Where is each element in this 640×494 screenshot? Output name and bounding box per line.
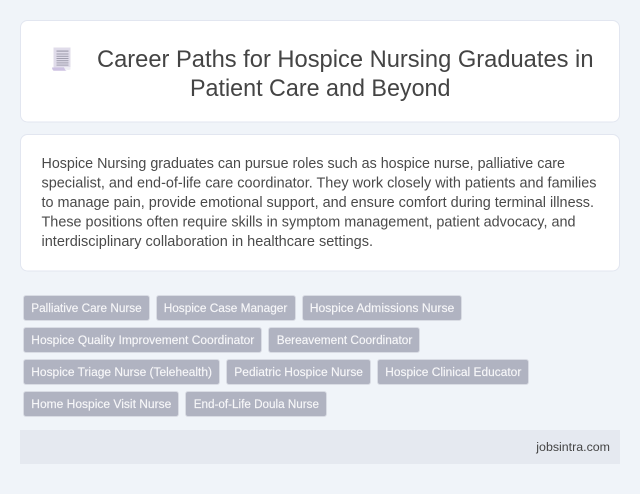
title: Patient Care and Beyond — [190, 75, 450, 102]
tag: Hospice Case Manager — [156, 296, 296, 320]
tag: Hospice Quality Improvement Coordinator — [24, 328, 262, 352]
tag: Hospice Admissions Nurse: Hospice Admissions Nurse — [310, 301, 454, 315]
tag: Hospice Quality Improvement Coordinator: Hospice Quality Improvement Coordinator — [31, 333, 254, 347]
tag: Bereavement Coordinator — [268, 328, 420, 352]
tag: Palliative Care Nurse: Palliative Care Nurse — [31, 301, 142, 315]
footer bar — [20, 430, 620, 464]
tag: Hospice Triage Nurse (Telehealth) — [24, 360, 220, 384]
tag: Hospice Admissions Nurse — [302, 296, 462, 320]
tag: Hospice Clinical Educator — [378, 360, 528, 384]
tag: End-of-Life Doula Nurse — [186, 392, 326, 416]
text block: description: specialist, and end-of-life care coordinator. They work closely with patients and families — [42, 176, 596, 192]
text block: description: to manage pain, provide emotional support, and ensure comfort during terminal illness. — [42, 195, 594, 211]
text block: description: interdisciplinary collaboration in healthcare settings. — [42, 234, 373, 250]
tag: Pediatric Hospice Nurse — [226, 360, 370, 384]
text block: description: These positions often require skills in symptom management, patient advocacy, and — [42, 214, 576, 230]
text block: description — [42, 156, 596, 250]
tag: Hospice Case Manager: Hospice Case Manager — [164, 301, 287, 315]
tag: Home Hospice Visit Nurse: Home Hospice Visit Nurse — [31, 397, 171, 411]
tag: Hospice Clinical Educator: Hospice Clinical Educator — [385, 365, 521, 379]
tag: Hospice Triage Nurse (Telehealth): Hospice Triage Nurse (Telehealth) — [31, 365, 212, 379]
footer source text: jobsintra.com — [535, 440, 610, 454]
text block: description: Hospice Nursing graduates can pursue roles such as hospice nurse, palliative care — [42, 156, 565, 172]
icon: document scroll — [52, 48, 70, 71]
tag: Palliative Care Nurse — [24, 296, 150, 320]
tag: Bereavement Coordinator: Bereavement Coordinator — [277, 333, 412, 347]
panel: header card — [20, 20, 620, 122]
title — [97, 46, 594, 102]
tag list: career roles — [24, 296, 528, 416]
title: Career Paths for Hospice Nursing Graduates in — [97, 46, 594, 73]
panel: description card — [20, 134, 620, 271]
tag: Pediatric Hospice Nurse: Pediatric Hospice Nurse — [234, 365, 363, 379]
tag: End-of-Life Doula Nurse: End-of-Life Doula Nurse — [194, 397, 319, 411]
tag: Home Hospice Visit Nurse — [24, 392, 178, 416]
